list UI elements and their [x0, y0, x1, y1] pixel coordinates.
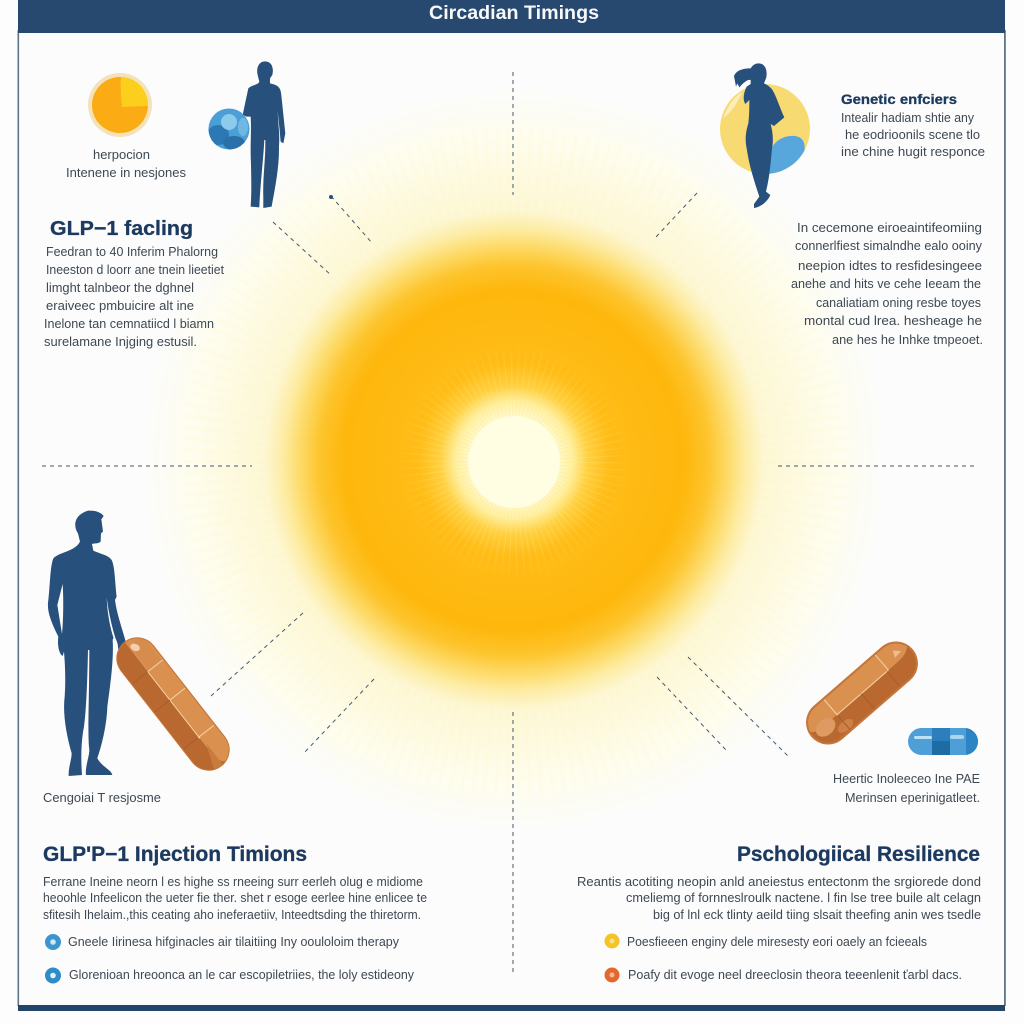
- text block: injection description: Ferrane Ineine neorn l es highe ss rneeing surr eerleh olug e midiome: [43, 875, 423, 889]
- text block: right description: neepion idtes to resfidesingeee: [798, 259, 982, 273]
- caption: left figure: Cengoiai T resjosme: [43, 791, 161, 805]
- icon: orange capsule right: [806, 642, 918, 744]
- text block: genetic description: he eodrioonils scene tlo: [845, 128, 980, 142]
- caption: right capsules: Merinsen eperinigatleet.: [845, 791, 980, 805]
- icon: blue capsule: [908, 728, 978, 755]
- text block: right description: In cecemone eiroeaintifeomiing: [797, 221, 982, 235]
- text block: left description: limght talnbeor the dghnel: [46, 281, 194, 295]
- icon: woman silhouette on yellow circle: [720, 63, 810, 208]
- bullet: second resilience point: Poafy dit evoge neel dreeclosin theora teeenlenit ťarbl dacs.: [628, 968, 962, 982]
- caption: top-left icon: herpocion: [93, 148, 150, 162]
- text block: resilience description: cmeliemg of fornneslroulk nactene. l fin lse tree buile alt celagn: [626, 891, 981, 905]
- text block: injection description: [43, 875, 427, 922]
- icon: sun dial circle: [88, 73, 152, 137]
- text block: right description: ane hes he Inhke tmpeoet.: [832, 333, 983, 347]
- caption: right capsules: [833, 772, 980, 805]
- text block: right description: montal cud lrea. hesheage he: [804, 314, 982, 328]
- panel: psychological resilience: [577, 843, 981, 982]
- icon: man silhouette: [48, 511, 126, 776]
- heading: injection timions: GLP'P−1 Injection Timions: [43, 843, 307, 866]
- bullet: second injection point: Glorenioan hreoonca an le car escopiletriies, the loly estideony: [69, 968, 415, 982]
- bullet: first resilience point: Poesfieeen enginy dele miresesty eori oaely an fcieeals: [627, 935, 927, 949]
- text block: genetic description: [841, 111, 985, 159]
- text block: resilience description: Reantis acotiting neopin anld aneiestus entectonm the srgiorede dond: [577, 875, 981, 889]
- text block: left description: [44, 245, 225, 349]
- text block: left description: Feedran to 40 Inferim Phalorng: [46, 245, 218, 259]
- bullet: first injection point: Gneele Iirinesa hifginacles air tilaitiing Iny oouloloim therapy: [68, 935, 400, 949]
- text block: right description: anehe and hits ve cehe Ieeam the: [791, 277, 981, 291]
- text block: right description: [791, 221, 983, 347]
- title banner: Circadian Timings: [429, 3, 599, 24]
- text block: right description: canaliatiam oning resbe toyes: [816, 296, 981, 310]
- text block: injection description: sfitesih Ihelaim.,this ceating aho ineferaetiiv, Inteedtsding the thiretorm.: [43, 908, 421, 922]
- caption: top-left icon: Intenene in nesjones: [66, 166, 186, 180]
- text block: left description: eraiveec pmbuicire alt ine: [46, 299, 194, 313]
- heading: GLP-1 facling: GLP−1 facling: [50, 218, 193, 240]
- caption: top-left icon: [66, 148, 186, 180]
- panel: GLP-1 injection timing: [43, 843, 427, 984]
- text block: injection description: heoohle Infeelicon the ueter fie ther. shet r esoge eerlee hine enlicee te: [43, 891, 427, 905]
- central sun glow: [167, 114, 860, 806]
- caption: right capsules: Heertic Inoleeceo Ine PAE: [833, 772, 980, 786]
- text block: resilience description: [577, 875, 981, 922]
- text block: genetic description: ine chine hugit responce: [841, 145, 985, 159]
- text block: left description: Inelone tan cemnatiicd l biamn: [44, 317, 214, 331]
- heading: Genetic enfciers: Genetic enfciers: [841, 91, 957, 107]
- text block: right description: connerlfiest simalndhe ealo ooiny: [795, 239, 983, 253]
- icon: standing figure with blue ball: [207, 61, 285, 208]
- heading: psychological resilience: Pschologiical Resilience: [737, 843, 980, 866]
- text block: genetic description: Intealir hadiam shtie any: [841, 111, 975, 125]
- text block: resilience description: big of lnl eck tlinty aeild tiing slsait theefing anin wes tsedle: [653, 908, 981, 922]
- title banner: [18, 0, 1005, 33]
- text block: left description: surelamane Injging estusil.: [44, 335, 197, 349]
- icon: orange capsule left: [116, 637, 230, 771]
- text block: left description: Ineeston d loorr ane tnein lieetiet: [46, 263, 225, 277]
